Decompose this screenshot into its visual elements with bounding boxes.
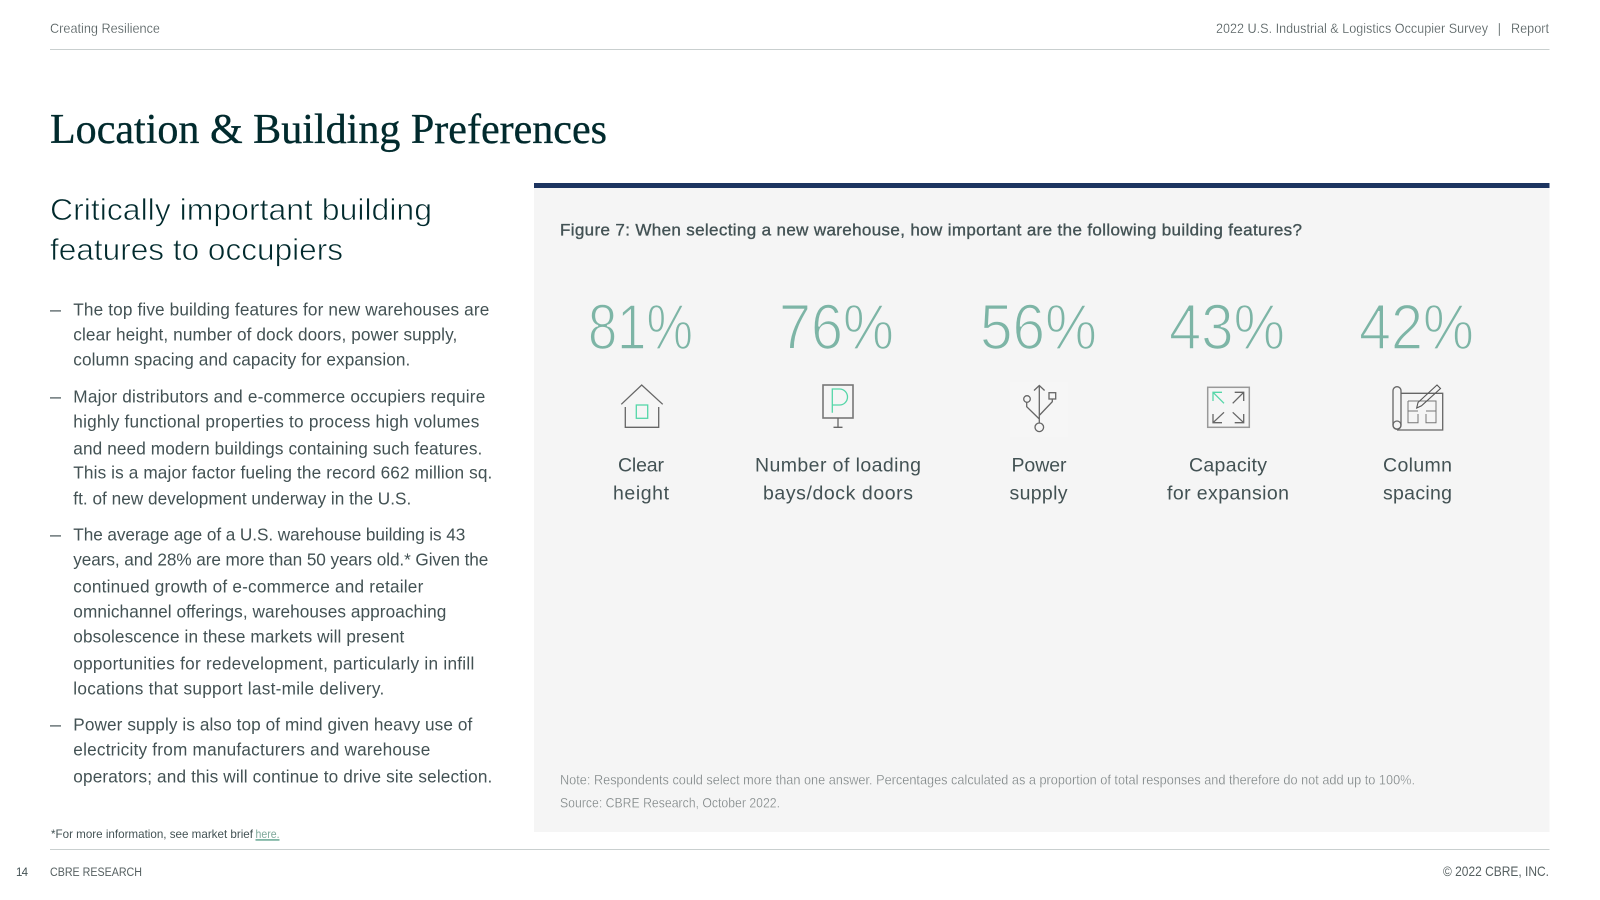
subheading: [50, 192, 432, 267]
icon: parking sign: [823, 385, 853, 427]
stat: column spacing: spacing: [1383, 482, 1452, 504]
bullet: top five features: [50, 300, 489, 370]
report type: Report: [1511, 20, 1549, 36]
note and source: Note: Respondents could select more than one answer. Percentages calculated as a proportion of total responses and therefore do not add up to 100%.: [560, 772, 1415, 788]
bullet: power supply: electricity from manufacturers and warehouse: [73, 740, 430, 760]
note and source: Source: CBRE Research, October 2022.: [560, 794, 780, 810]
bullet: top five features: clear height, number of dock doors, power supply,: [73, 324, 457, 344]
footnote: *For more information, see market brief: [51, 827, 254, 841]
bullet: major distributors: ft. of new development underway in the U.S.: [73, 488, 411, 508]
bullet: power supply: operators; and this will continue to drive site selection.: [73, 766, 492, 786]
bullet: average age: [50, 524, 488, 698]
bullet: average age: omnichannel offerings, warehouses approaching: [73, 602, 446, 622]
stat: power supply: 56%: [980, 291, 1097, 363]
bullet: average age: opportunities for redevelopment, particularly in infill: [73, 654, 474, 674]
footer label: CBRE RESEARCH: [50, 867, 142, 879]
bullet: power supply: –: [50, 714, 62, 734]
stat: power supply: Power: [1012, 454, 1067, 476]
bullet: top five features: column spacing and capacity for expansion.: [73, 350, 410, 370]
stat: column spacing: 42%: [1359, 291, 1474, 363]
bullet: average age: locations that support last-mile delivery.: [73, 678, 384, 698]
bullet: major distributors: Major distributors and e-commerce occupiers require: [73, 386, 485, 406]
page number: 14: [16, 867, 29, 879]
copyright: © 2022 CBRE, INC.: [1443, 863, 1549, 879]
bullet: major distributors: highly functional properties to process high volumes: [73, 412, 479, 432]
stat: loading bays: bays/dock doors: [763, 482, 913, 504]
icon: usb: [1010, 382, 1068, 437]
stat: power supply: supply: [1010, 482, 1068, 504]
stat: column spacing: [1359, 291, 1474, 504]
panel: figure 7: [534, 183, 1550, 832]
bullet: average age: obsolescence in these markets will present: [73, 626, 405, 646]
stat: power supply: [980, 291, 1097, 504]
stat: clear height: [588, 291, 693, 504]
stat: capacity: 43%: [1169, 291, 1285, 363]
icon: blueprint and pencil: [1393, 385, 1443, 430]
bullet: power supply: [50, 714, 492, 786]
stat: clear height: height: [613, 482, 670, 504]
icon: house: [621, 385, 663, 427]
bullet: average age: continued growth of e-commerce and retailer: [73, 576, 424, 596]
bullet: top five features: The top five building features for new warehouses are: [73, 300, 489, 320]
bullet: major distributors: –: [50, 386, 62, 406]
bullet: average age: –: [50, 524, 62, 544]
stat: capacity: Capacity: [1189, 454, 1267, 476]
page footer: [16, 863, 1549, 879]
bullet: major distributors: This is a major factor fueling the record 662 million sq.: [73, 462, 492, 482]
separator: |: [1498, 20, 1501, 36]
stat: loading bays: 76%: [779, 291, 894, 363]
stat: column spacing: Column: [1383, 454, 1452, 476]
bullet: major distributors: and need modern buildings containing such features.: [73, 438, 482, 458]
note and source: [560, 772, 1415, 810]
bullet: average age: The average age of a U.S. warehouse building is 43: [73, 524, 465, 544]
footnote: here.: [256, 827, 280, 841]
bullet: average age: years, and 28% are more than 50 years old.* Given the: [73, 550, 488, 570]
stat: capacity: for expansion: [1167, 482, 1289, 504]
stat: loading bays: Number of loading: [755, 454, 921, 476]
stat: clear height: 81%: [588, 291, 693, 363]
page header: [50, 20, 1549, 36]
report title: 2022 U.S. Industrial & Logistics Occupier Survey: [1216, 20, 1488, 36]
bullet list: [50, 300, 492, 786]
section label: Creating Resilience: [50, 20, 160, 36]
title: Location & Building Preferences: [50, 107, 607, 153]
subheading: features to occupiers: [50, 232, 343, 267]
stat: loading bays: [755, 291, 921, 504]
icon: expand arrows: [1208, 387, 1249, 427]
bullet: major distributors: [50, 386, 492, 508]
bullet: top five features: –: [50, 300, 62, 320]
figure heading: Figure 7: When selecting a new warehouse, how important are the following building features?: [560, 220, 1302, 239]
subheading: Critically important building: [50, 192, 432, 227]
stat: clear height: Clear: [618, 454, 664, 476]
stat: capacity: [1167, 291, 1289, 504]
bullet: power supply: Power supply is also top of mind given heavy use of: [73, 714, 473, 734]
